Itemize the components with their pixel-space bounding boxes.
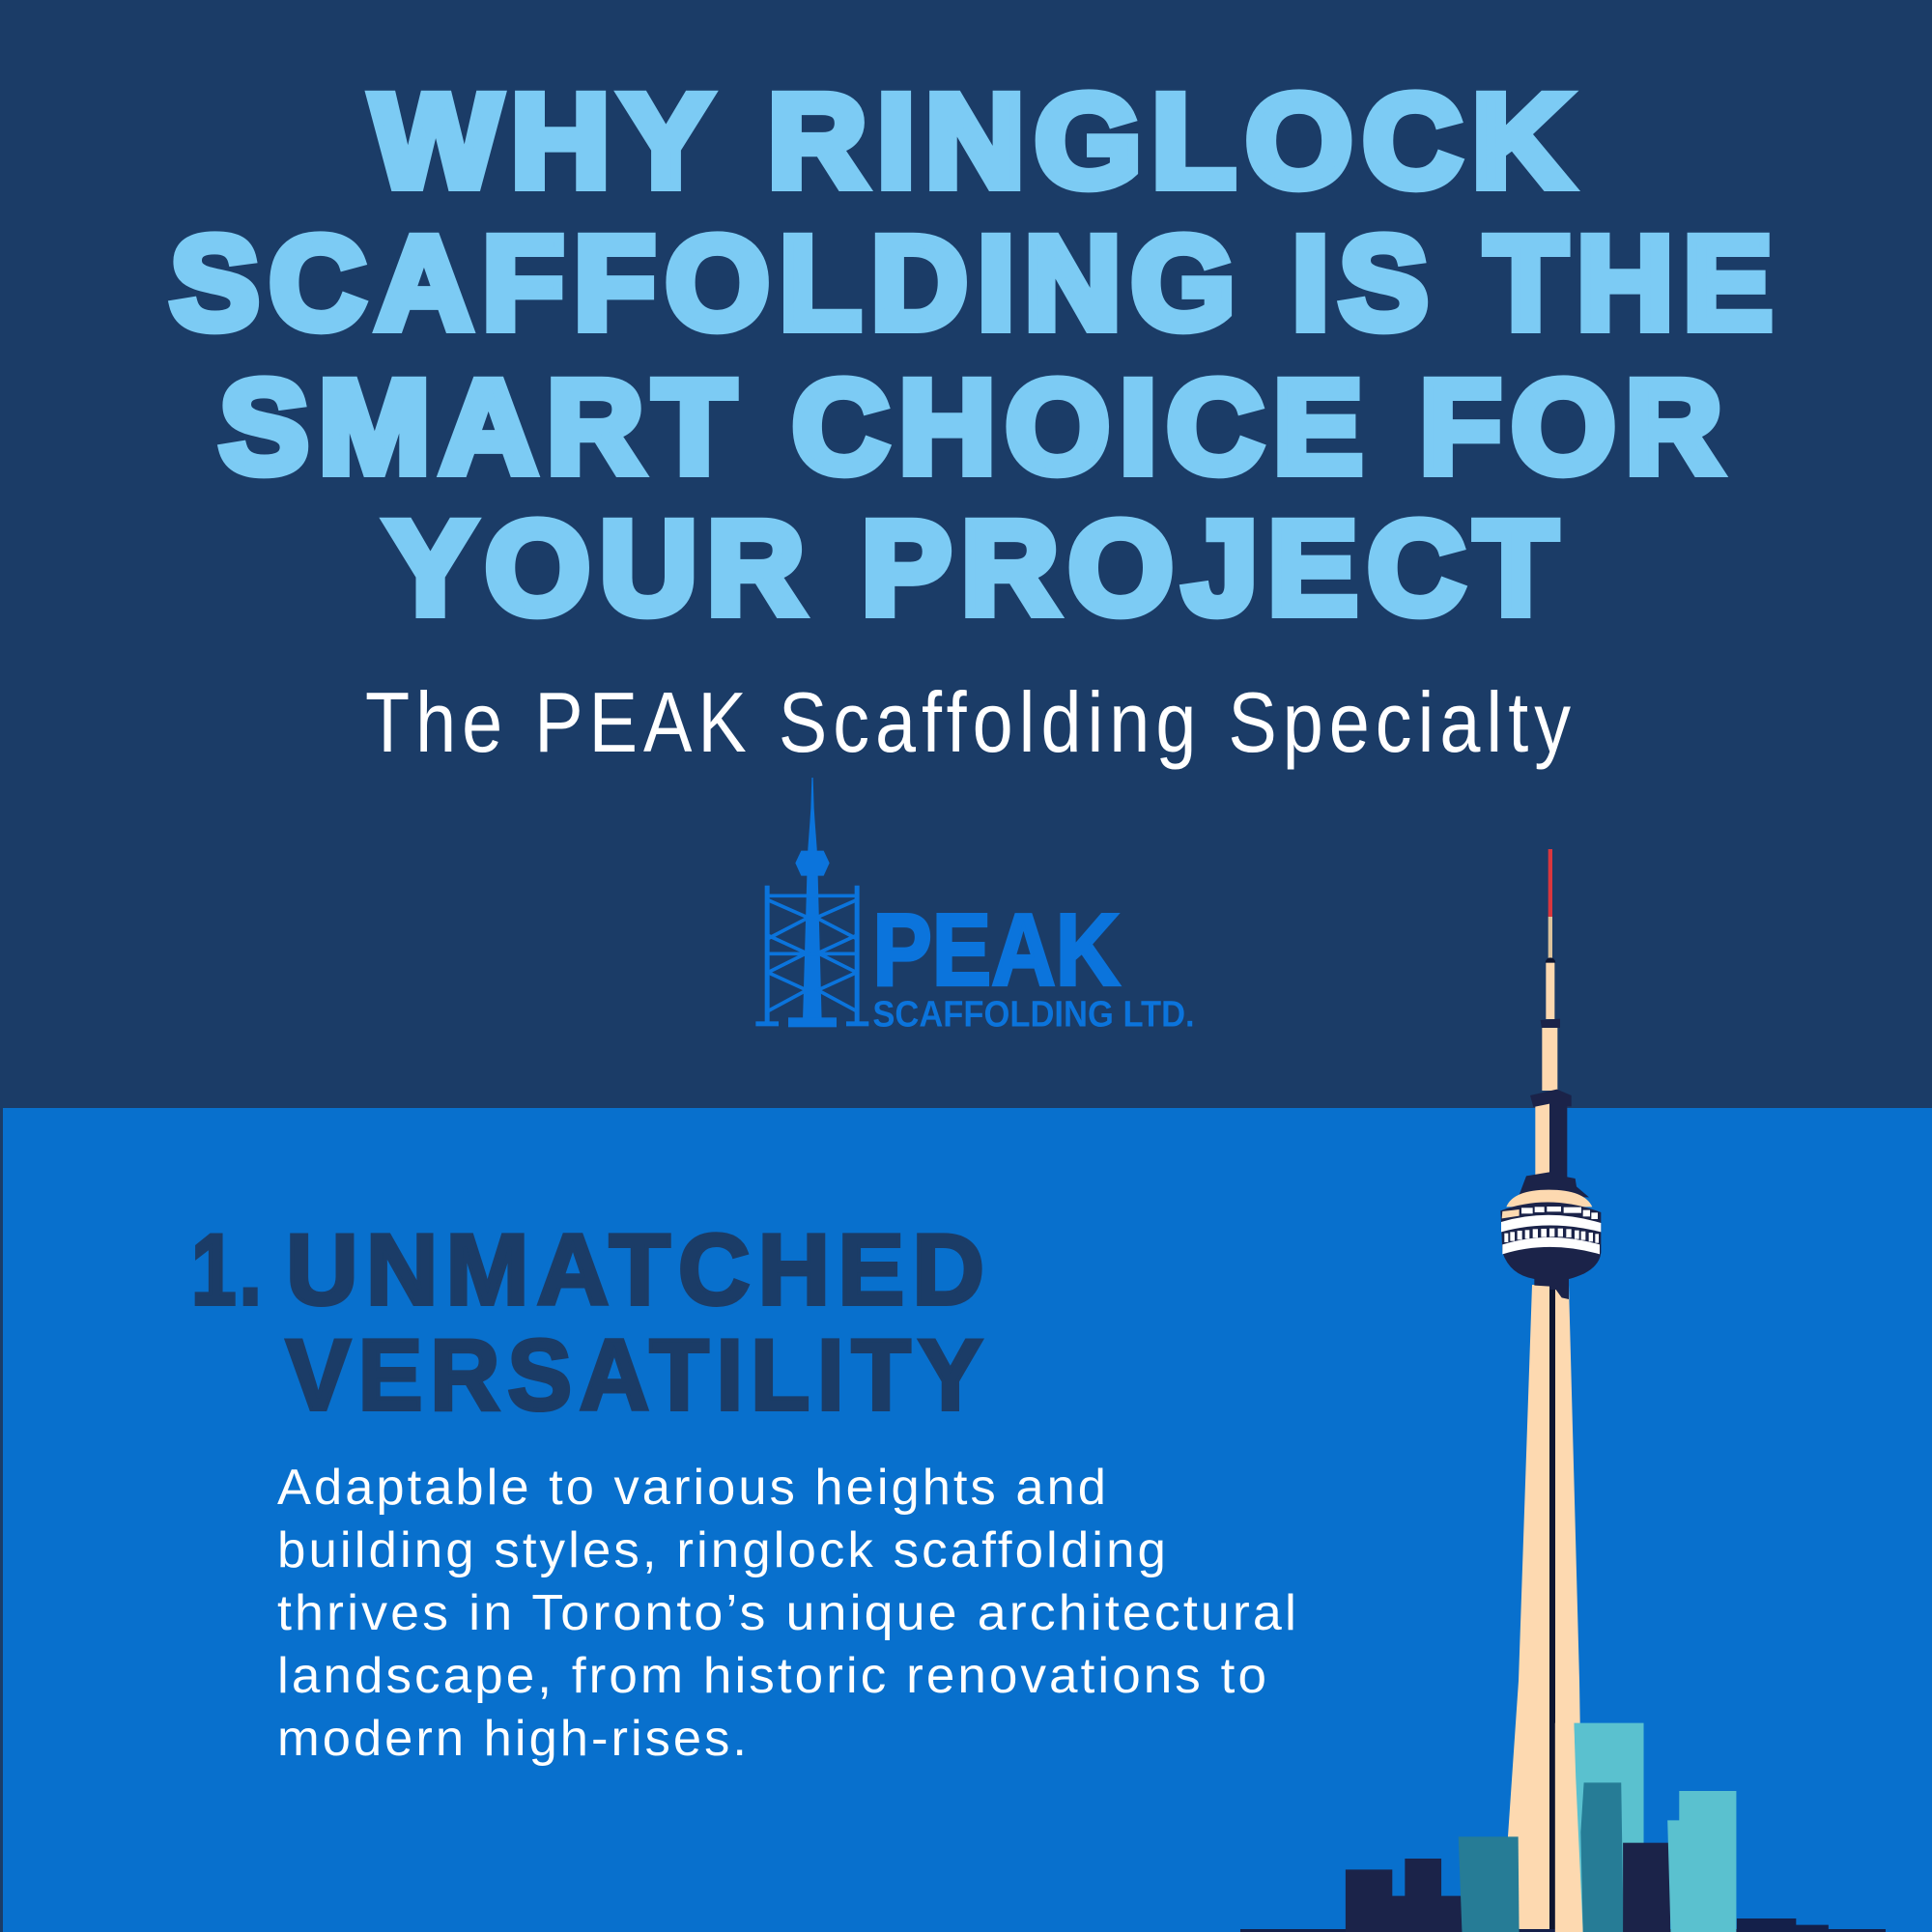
- body text: landscape, from historic renovations to: [277, 1648, 1269, 1704]
- title: YOUR PROJECT: [385, 495, 1567, 642]
- logo icon: tower in scaffold: [755, 778, 868, 1027]
- building: light teal tall: [1574, 1723, 1644, 1932]
- tower overlap sliver: [1555, 1723, 1583, 1932]
- tower shaft: [1508, 1285, 1583, 1932]
- title: WHY RINGLOCK: [371, 68, 1581, 215]
- building: dark teal centre: [1580, 1782, 1624, 1932]
- body text: thrives in Toronto’s unique architectural: [277, 1585, 1299, 1641]
- logo: Peak Scaffolding: [755, 778, 1195, 1036]
- panel: section background: [3, 1108, 1932, 1932]
- heading: Unmatched Versatility: UNMATCHED: [286, 1214, 992, 1326]
- logo wordmark: Scaffolding Ltd: SCAFFOLDING LTD.: [872, 995, 1195, 1036]
- building: dark teal left: [1459, 1836, 1520, 1932]
- building: dark centre: [1623, 1843, 1670, 1932]
- body text: building styles, ringlock scaffolding: [277, 1522, 1169, 1578]
- building: dark left: [1346, 1859, 1462, 1932]
- pod: [1506, 1190, 1592, 1207]
- building: dark low right: [1737, 1918, 1829, 1932]
- title: [170, 68, 1782, 642]
- heading: Unmatched Versatility: [286, 1214, 992, 1432]
- tower upper section and observation pod: [1500, 849, 1601, 1299]
- panel: header background: [0, 0, 1932, 1108]
- body text: modern high-rises.: [277, 1711, 750, 1767]
- logo wordmark: PEAK: PEAK: [872, 893, 1120, 1007]
- title: SCAFFOLDING IS THE: [170, 210, 1782, 357]
- body text: [277, 1460, 1299, 1767]
- building: light teal right: [1667, 1791, 1736, 1932]
- body text: Adaptable to various heights and: [277, 1460, 1109, 1516]
- heading number: 1.: [191, 1214, 265, 1326]
- ground line: [1240, 1929, 1886, 1932]
- antenna: [1548, 849, 1552, 917]
- subtitle: The PEAK Scaffolding Specialty: [365, 674, 1577, 770]
- title: SMART CHOICE FOR: [219, 354, 1732, 501]
- illustration: CN Tower and skyline: [1240, 849, 1886, 1932]
- skyline buildings: [1240, 1723, 1886, 1932]
- heading: Unmatched Versatility: VERSATILITY: [286, 1320, 990, 1432]
